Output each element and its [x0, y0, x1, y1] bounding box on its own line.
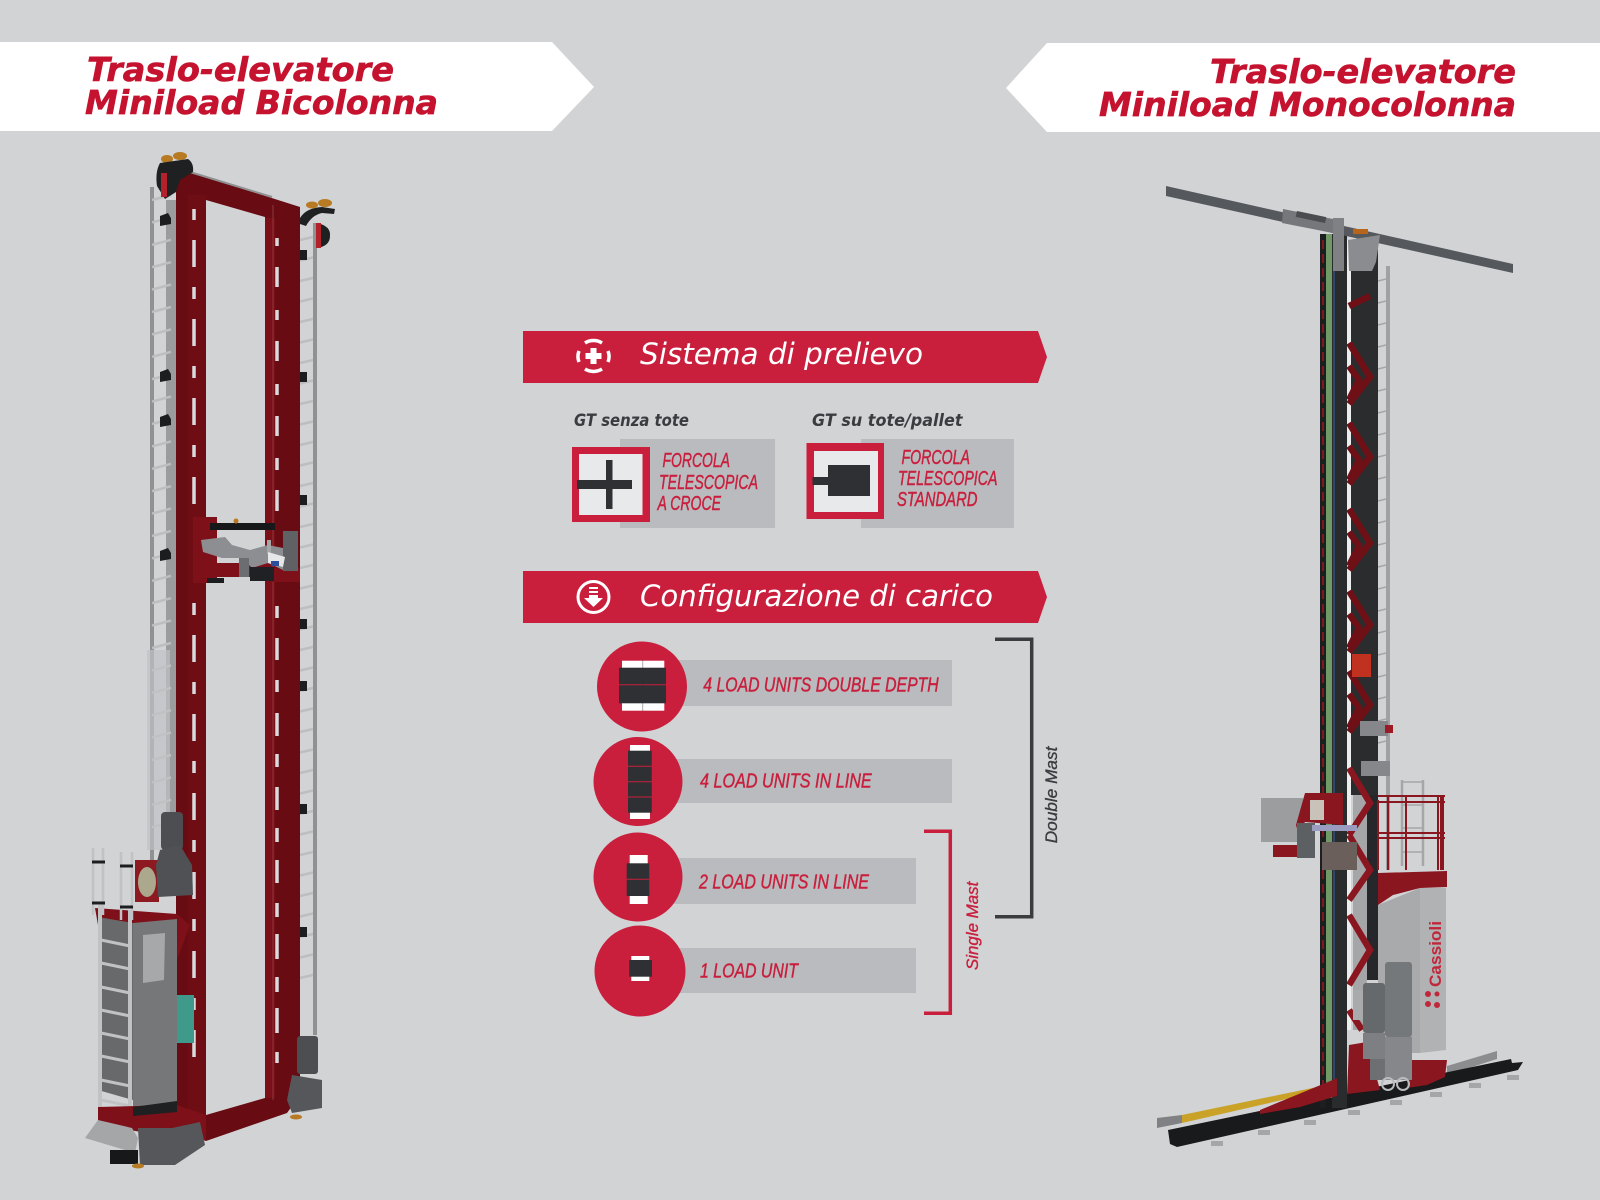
lifting carriage — [193, 517, 300, 583]
icon: two in line — [627, 855, 649, 904]
mast front section — [1320, 234, 1347, 1108]
red check plate — [1352, 654, 1371, 677]
row: 2 load units in line — [594, 832, 916, 922]
header: Sistema di prelievo: Sistema di prelievo — [640, 337, 923, 371]
machine: single-mast stacker crane — [1157, 186, 1523, 1147]
header: Configurazione di carico: Configurazione di carico — [640, 579, 993, 613]
row: 1 load unit — [594, 926, 916, 1016]
bracket: Double Mast — [995, 639, 1061, 917]
floor rails — [1157, 1051, 1523, 1147]
icon: single load — [629, 956, 652, 981]
banner: Miniload Monocolonna — [1006, 43, 1600, 132]
top left hoist — [156, 152, 193, 199]
platform deck — [95, 908, 190, 960]
banner: Miniload Bicolonna: Traslo-elevatore — [87, 50, 394, 89]
banner: Miniload Bicolonna: Miniload Bicolonna — [85, 83, 438, 122]
bracket: Double Mast: Double Mast — [1042, 745, 1061, 843]
mast slots — [194, 209, 277, 1063]
option: GT su tote/pallet: FORCOLA — [902, 447, 970, 469]
platform railing — [1378, 780, 1445, 870]
row: 4 load units in line: 4 LOAD UNITS IN LINE — [700, 771, 872, 793]
lifting and travel motors — [1260, 962, 1447, 1114]
mast gray boxes — [1360, 721, 1393, 776]
ladder — [1378, 266, 1390, 870]
header: Configurazione di carico — [523, 571, 1047, 623]
option: GT senza tote — [572, 411, 775, 528]
option: GT su tote/pallet: STANDARD — [897, 489, 978, 511]
platform floor — [1378, 871, 1447, 905]
red frame — [176, 172, 300, 1141]
banner: Miniload Monocolonna: Traslo-elevatore — [1210, 52, 1516, 91]
row: 4 load units double depth — [597, 642, 952, 732]
row: 1 load unit: 1 LOAD UNIT — [700, 961, 799, 983]
banner: Miniload Monocolonna: Miniload Monocolonna — [1099, 85, 1516, 124]
left ladder — [147, 187, 176, 860]
option: GT senza tote: FORCOLA — [662, 450, 730, 472]
icon: standard fork — [806, 443, 884, 519]
machine cabinet — [1353, 888, 1446, 1053]
foot motor — [287, 1036, 322, 1120]
bracket: Single Mast — [924, 831, 982, 1013]
icon: pick crosshair — [578, 341, 609, 371]
drive motor and wheel — [135, 812, 193, 902]
icon: four in line — [628, 745, 652, 819]
option: GT su tote/pallet — [806, 411, 1014, 528]
row: 4 load units double depth: 4 LOAD UNITS DOUBLE DEPTH — [703, 675, 939, 697]
machine: double-mast stacker crane — [85, 152, 335, 1168]
option: GT senza tote: GT senza tote — [574, 411, 689, 431]
electrical cabinet — [98, 917, 194, 1107]
option: GT su tote/pallet: TELESCOPICA — [898, 468, 998, 490]
mast rear section — [1347, 240, 1378, 1030]
base and step — [85, 1101, 206, 1168]
row: 4 load units in line — [594, 737, 952, 826]
row: 2 load units in line: 2 LOAD UNITS IN LINE — [698, 871, 870, 893]
option: GT senza tote: TELESCOPICA — [659, 472, 758, 494]
load carriage — [1261, 793, 1357, 870]
banner: Miniload Bicolonna — [0, 42, 594, 131]
option: GT senza tote: A CROCE — [657, 493, 721, 515]
icon: double depth load — [619, 660, 666, 711]
option: GT su tote/pallet: GT su tote/pallet — [812, 411, 963, 431]
right ladder — [300, 223, 317, 1035]
top guide beam — [1166, 186, 1513, 273]
ladder clips — [160, 213, 307, 937]
cabinet ladder — [92, 848, 133, 1130]
bracket: Single Mast: Single Mast — [963, 880, 982, 970]
icon: down arrow — [578, 582, 609, 612]
icon: cross fork — [572, 447, 650, 522]
top guide brackets — [1282, 209, 1380, 271]
cabinet logo: Cassioli — [1426, 921, 1445, 987]
top right hoist — [300, 199, 335, 248]
header: Sistema di prelievo — [523, 331, 1047, 383]
lattice bracing — [1349, 296, 1370, 1030]
